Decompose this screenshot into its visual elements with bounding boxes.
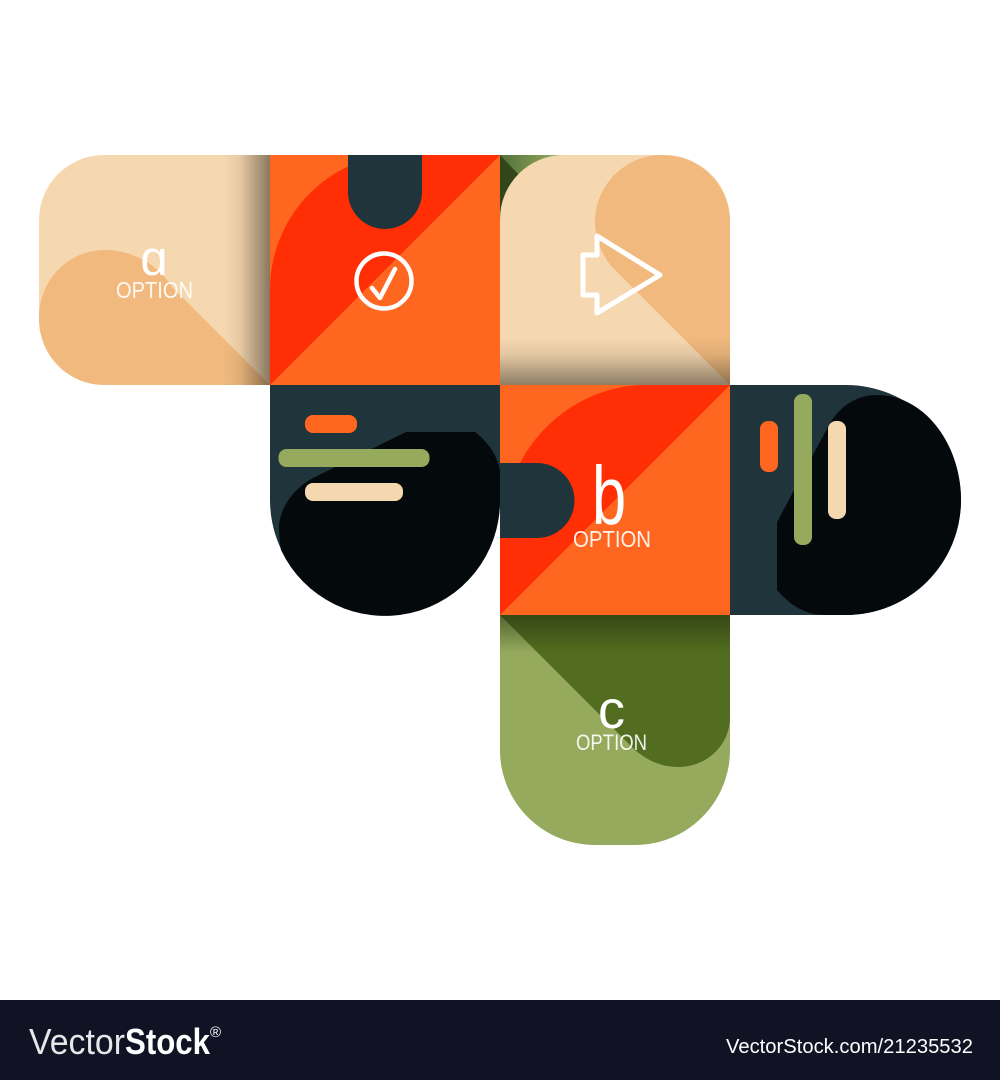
- image id: VectorStock.com/21235532: [726, 1036, 973, 1058]
- logo: VectorStock: ®: [210, 1024, 221, 1041]
- bar: cream: [828, 421, 846, 519]
- label: option b: OPTION: [573, 526, 651, 552]
- letter c: c: [598, 680, 625, 740]
- folded green corner behind arrow panel: [500, 155, 565, 225]
- logo: VectorStock: [29, 1021, 221, 1062]
- panel: option b: [500, 385, 730, 615]
- letter a: ɑ: [140, 232, 168, 286]
- panel: arrow tile: [500, 155, 730, 385]
- icon: arrow outline: [583, 236, 660, 313]
- panel: checkmark tile: [270, 155, 500, 385]
- bar: cream: [305, 483, 403, 501]
- panel: dark right with vertical bars: [730, 385, 961, 615]
- label: option c: OPTION: [576, 730, 647, 755]
- logo: VectorStock: Vector: [29, 1021, 125, 1062]
- icon: check circle: [356, 254, 412, 308]
- panel: option c: [500, 615, 730, 845]
- bar: green: [278, 449, 430, 467]
- letter b: b: [592, 450, 626, 542]
- logo: VectorStock: Stock: [125, 1021, 211, 1062]
- footer bar: [0, 1000, 1000, 1080]
- label: option a: OPTION: [116, 277, 193, 303]
- bar: orange: [305, 415, 357, 433]
- bar: green: [794, 394, 812, 545]
- panel: dark semicircle with bars: [270, 385, 500, 616]
- tab: dark left: [500, 463, 574, 538]
- bar: orange: [760, 421, 778, 472]
- tab: dark top: [348, 155, 422, 229]
- panel: option a: [39, 155, 270, 385]
